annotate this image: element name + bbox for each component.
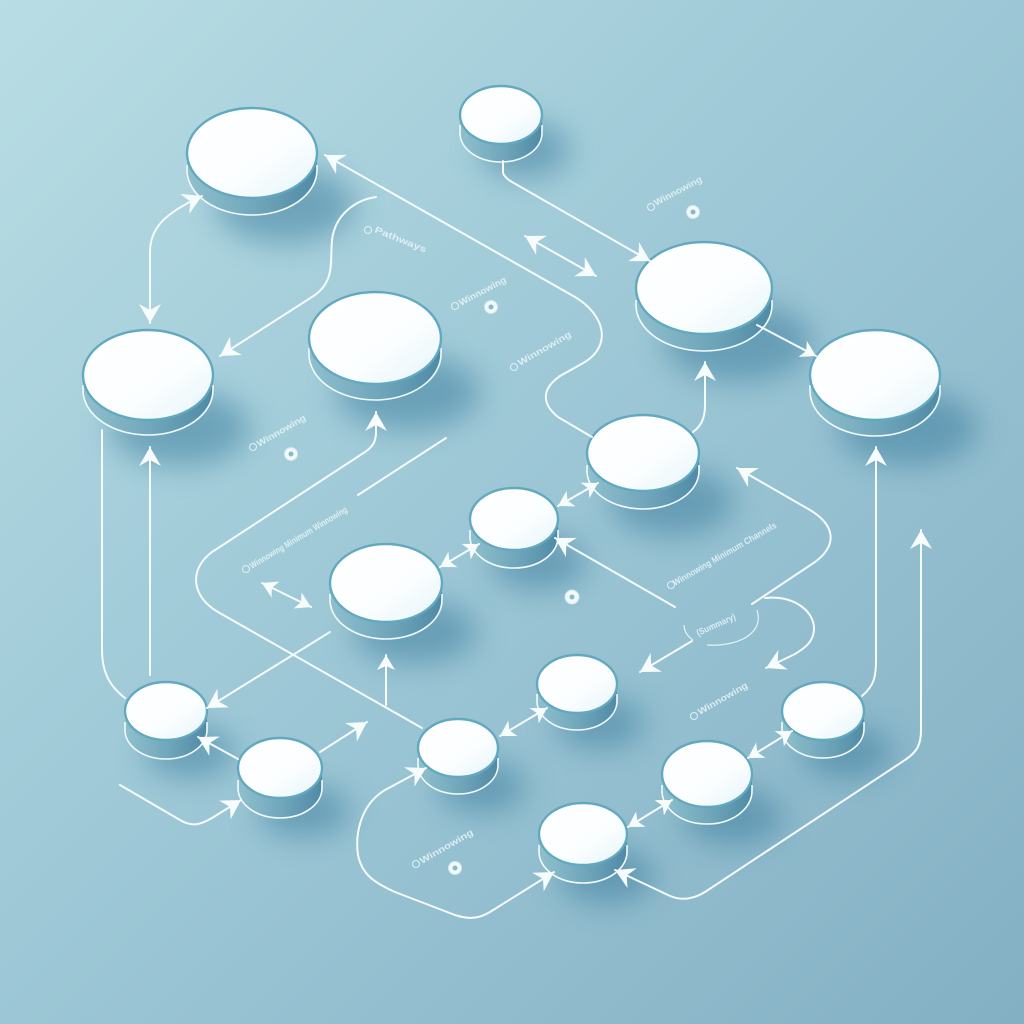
arrow: node 15 up to node 4	[862, 447, 876, 696]
node 14: lower right	[662, 741, 783, 845]
label: long left: Winnowing Minimum Winnowing	[248, 504, 349, 571]
arrow: diagonal to node 8	[555, 538, 675, 607]
label: lower right	[690, 680, 749, 720]
arrow: node 10 and node 13	[500, 708, 547, 736]
label: long left	[242, 504, 349, 572]
node 2: upper left large	[187, 108, 355, 243]
arrow: big outer path up right	[615, 530, 921, 899]
node 10: lower centre	[537, 655, 644, 749]
label: lower right: Winnowing	[696, 680, 749, 717]
arrow: top node to node 3	[503, 161, 650, 261]
icon: lower centre badge	[448, 862, 462, 874]
arrow: down left from ring	[640, 641, 692, 672]
node 5: far left large	[83, 330, 250, 466]
node 3: upper right large	[636, 242, 812, 382]
arrow: ring curve down	[765, 598, 814, 668]
node 16: bottom	[539, 803, 655, 904]
arrow: to node 11	[207, 632, 330, 708]
arrow: node 3 to node 4	[757, 325, 816, 356]
label: top right: Winnowing	[652, 174, 704, 208]
label: long right: Winnowing Minimum Channels	[671, 520, 778, 588]
arrow: node 7 and node 8	[558, 483, 598, 506]
arrow: to node 12	[120, 785, 241, 824]
label: in ring: (Summary)	[695, 612, 737, 638]
node 6: centre left large	[309, 292, 480, 430]
arrow: long S-curve to node 2	[325, 155, 602, 437]
arrow: node 12 up right	[320, 722, 367, 752]
arrow: small double near node 9	[262, 583, 311, 607]
arrow: loop up to node 6	[196, 412, 422, 728]
label: centre: Winnowing	[516, 329, 573, 368]
arrow: node 2 to node 5	[150, 196, 202, 323]
icon: under node 5 badge	[284, 448, 298, 460]
label: centre	[510, 329, 573, 370]
node 1: top small	[460, 86, 570, 178]
arrow: node 11 up to node 5	[149, 447, 151, 675]
arrow: node 8 and node 9	[440, 544, 479, 567]
label: lower centre	[412, 827, 475, 868]
label: centre top: Pathways	[373, 225, 428, 254]
node 8: centre	[470, 488, 586, 590]
line: node 11 to node 5 outer	[102, 430, 125, 698]
arrow: node 14 and node 15	[748, 731, 792, 758]
label: beside node 6: Winnowing	[457, 275, 508, 308]
node 12: lower left second	[238, 738, 350, 837]
icon: below node 8 badge	[565, 590, 579, 604]
node 9: centre lower left	[330, 544, 477, 664]
arrow: up to node 9	[385, 655, 387, 705]
node 15: right lower	[782, 682, 892, 778]
arrow: curve to node 5	[220, 197, 376, 356]
arrow: loop node 13 to node 16	[357, 768, 554, 918]
ring bracket	[684, 610, 758, 645]
line: rounded corner from right arrow	[737, 468, 831, 604]
arrow: node 7 up to node 3	[693, 362, 705, 432]
node 7: centre right	[587, 415, 734, 536]
node 13: lower middle	[418, 719, 526, 813]
label: centre top	[364, 225, 428, 254]
icon: beside node 6 badge	[484, 300, 498, 314]
arrow: node 12 to node 11	[198, 737, 238, 759]
node 4: far right large	[810, 330, 978, 466]
label: under node 5: Winnowing	[255, 413, 308, 449]
arrow: small double near top	[525, 236, 596, 276]
label: under node 5	[250, 413, 308, 450]
arrow: node 14 and node 16	[628, 800, 672, 827]
label: lower centre: Winnowing	[418, 827, 475, 866]
icon: top right badge	[686, 206, 700, 218]
line: short diagonal	[358, 438, 446, 495]
node 11: lower left	[125, 682, 235, 778]
